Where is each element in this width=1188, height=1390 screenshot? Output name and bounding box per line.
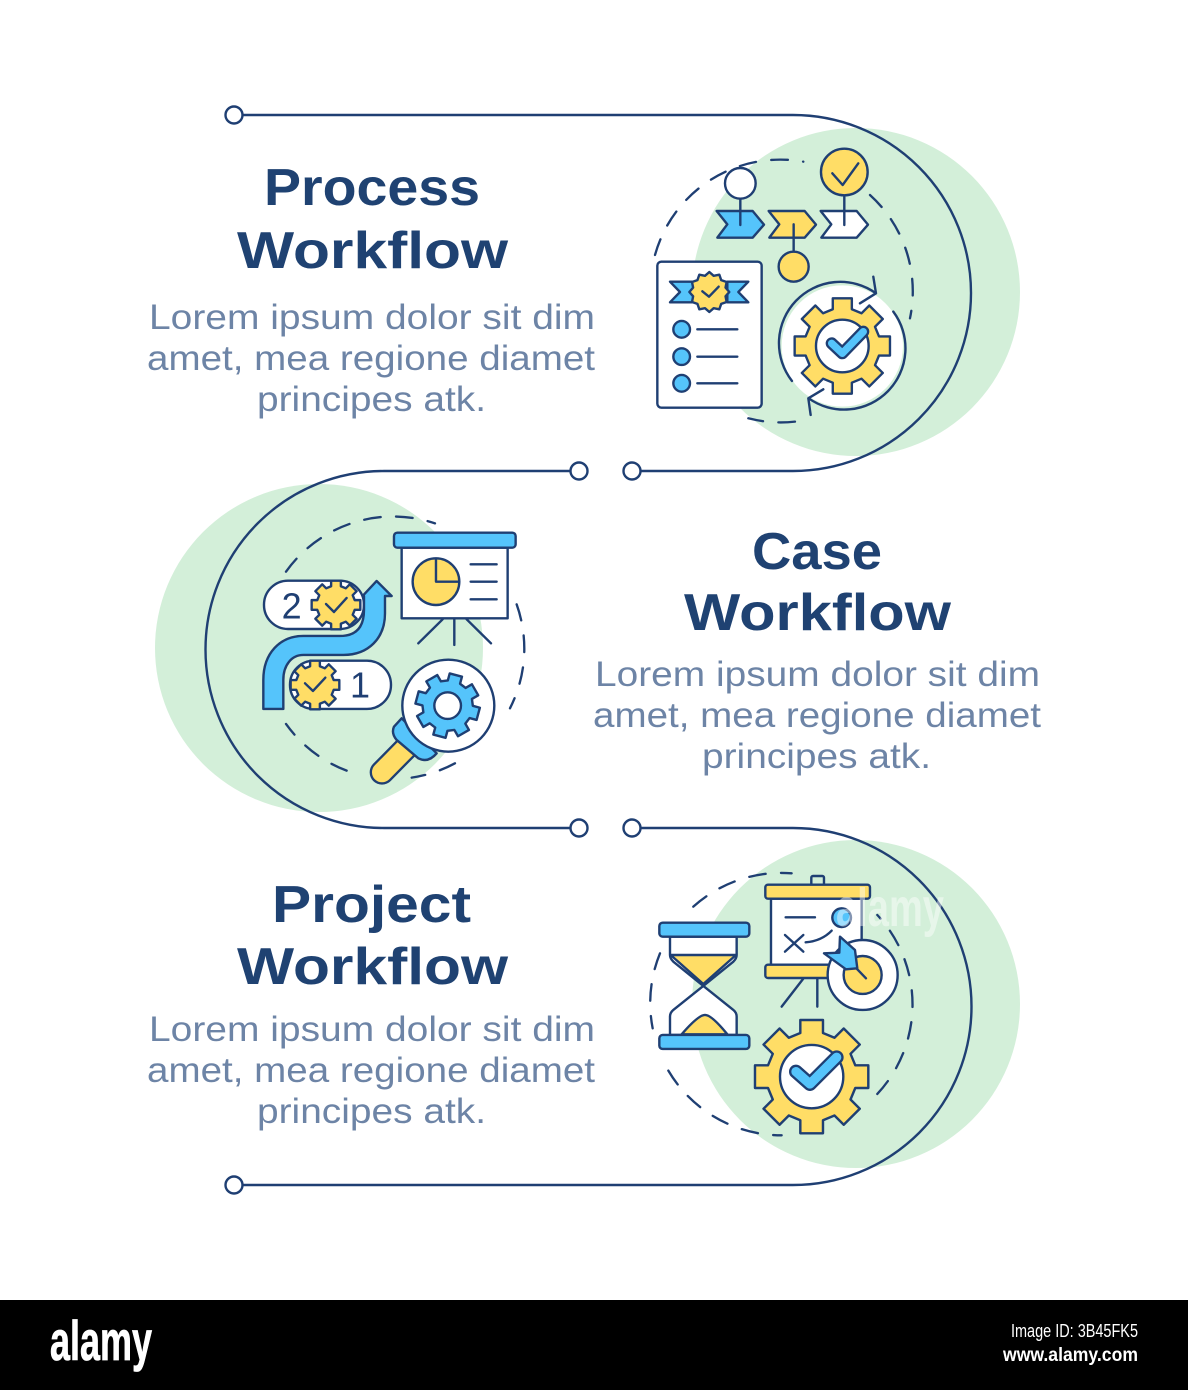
icon: checklist document xyxy=(657,262,762,408)
body text: case workflow: amet, mea regione diamet xyxy=(593,696,1041,735)
body text: case workflow xyxy=(593,655,1041,776)
watermark: alamy xyxy=(836,878,944,938)
icon group: process workflow xyxy=(655,149,913,422)
body text: project workflow: principes atk. xyxy=(257,1092,486,1131)
panel: case workflow text xyxy=(593,523,1041,776)
body text: process workflow: Lorem ipsum dolor sit dim xyxy=(149,298,595,337)
image id: Image ID: 3B45FK5 xyxy=(1011,1321,1138,1341)
connector line: process xyxy=(226,106,971,480)
connector line: case xyxy=(206,462,587,836)
icon: steps with arrow: 1 xyxy=(350,664,370,705)
icon: magnifier with gear xyxy=(382,660,494,772)
body text: project workflow: amet, mea regione diamet xyxy=(147,1051,595,1090)
connector line: project xyxy=(226,820,972,1194)
website: www.alamy.com xyxy=(1002,1345,1138,1366)
heading: project workflow xyxy=(237,876,509,996)
body text: case workflow: Lorem ipsum dolor sit dim xyxy=(595,655,1040,694)
icon: gear with refresh arrows xyxy=(779,277,905,415)
heading: project workflow: Workflow xyxy=(237,938,509,996)
body text: process workflow xyxy=(147,298,595,419)
heading: case workflow xyxy=(684,523,952,642)
heading: process workflow xyxy=(237,159,509,280)
heading: case workflow: Case xyxy=(752,523,882,581)
green circle: case xyxy=(155,484,483,812)
icon: presentation board with pie chart xyxy=(394,533,516,645)
heading: project workflow: Project xyxy=(272,876,471,934)
green circle: project xyxy=(692,840,1020,1168)
panel: project workflow text xyxy=(147,876,595,1131)
body text: case workflow: principes atk. xyxy=(702,737,931,776)
body text: process workflow: amet, mea regione diamet xyxy=(147,339,595,378)
panel: process workflow text xyxy=(147,159,595,419)
body text: process workflow: principes atk. xyxy=(257,380,486,419)
icon group: project workflow xyxy=(650,873,913,1135)
icon group: case workflow xyxy=(263,517,524,778)
icon: gear with check xyxy=(755,1020,868,1133)
icon: flow chevrons xyxy=(717,149,868,282)
icon: strategy board with target xyxy=(765,876,898,1010)
footer logo: alamy xyxy=(50,1309,152,1372)
heading: process workflow: Workflow xyxy=(237,222,509,280)
footer bar xyxy=(0,1300,1188,1390)
icon: steps with arrow: 2 xyxy=(282,585,302,626)
body text: project workflow: Lorem ipsum dolor sit dim xyxy=(149,1010,595,1049)
heading: case workflow: Workflow xyxy=(684,584,952,642)
green circle: process xyxy=(692,128,1020,456)
icon: hourglass xyxy=(659,923,749,1049)
body text: project workflow xyxy=(147,1010,595,1131)
icon: steps with arrow xyxy=(263,581,392,709)
heading: process workflow: Process xyxy=(264,159,480,217)
